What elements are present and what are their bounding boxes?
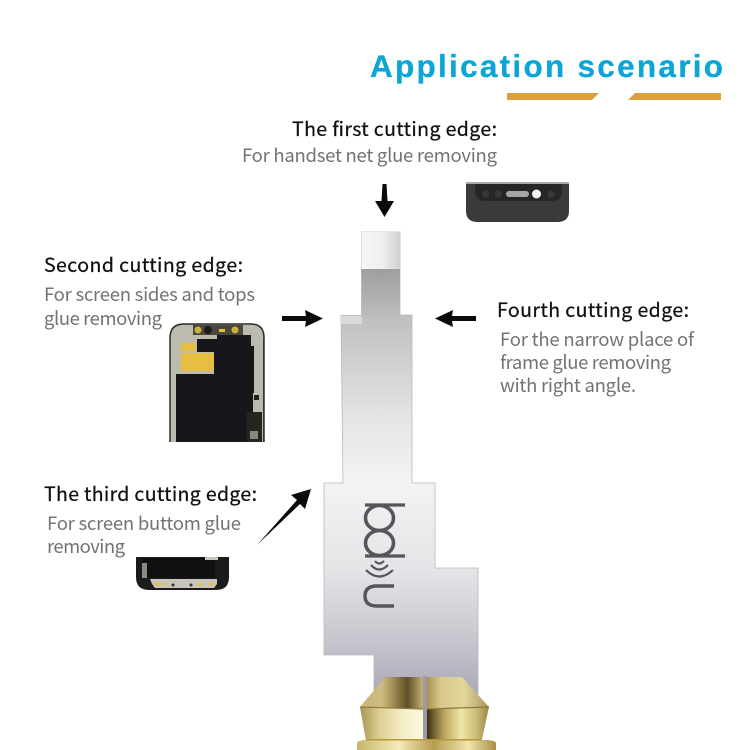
text: third cutting edge: The third cutting edge: <box>44 478 257 507</box>
text: third cutting edge: For screen buttom glue <box>47 510 241 536</box>
gold handle collet <box>357 676 496 750</box>
text: second cutting edge: For screen sides and tops <box>44 281 255 307</box>
icon: handset net part <box>466 182 569 222</box>
icon: screen bottom part <box>136 557 229 590</box>
first cutting edge tip <box>362 232 400 269</box>
arrow: left to fourth edge <box>435 310 476 327</box>
text: fourth cutting edge: frame glue removing <box>500 349 672 375</box>
arrow: down to first edge <box>375 184 394 217</box>
arrow: diagonal to third edge <box>257 489 311 545</box>
blade upper neck <box>362 269 400 316</box>
icon: screen back, large <box>170 324 264 442</box>
text: first cutting edge <box>242 113 498 168</box>
text: third cutting edge: removing <box>47 533 126 559</box>
title: Application scenario <box>370 48 723 84</box>
arrow: right to second edge <box>282 310 323 327</box>
slot <box>423 676 427 741</box>
text: fourth cutting edge: For the narrow place of <box>500 326 695 352</box>
text: second cutting edge: glue removing <box>44 305 163 331</box>
title underline <box>507 93 721 100</box>
blade body <box>324 232 478 700</box>
text: fourth cutting edge: with right angle. <box>500 372 636 398</box>
left jaw <box>360 677 423 709</box>
text: fourth cutting edge: Fourth cutting edge: <box>497 294 689 323</box>
right jaw <box>427 677 489 709</box>
text: third cutting edge <box>44 478 257 559</box>
cutting tool blade <box>324 232 478 700</box>
text: fourth cutting edge <box>497 294 695 398</box>
text: first cutting edge: The first cutting edge: <box>292 113 497 142</box>
logo on blade <box>365 505 405 606</box>
text: first cutting edge: For handset net glue removing <box>242 142 498 168</box>
text: second cutting edge: Second cutting edge: <box>44 249 243 278</box>
collar <box>357 740 496 750</box>
text: second cutting edge <box>44 249 255 331</box>
